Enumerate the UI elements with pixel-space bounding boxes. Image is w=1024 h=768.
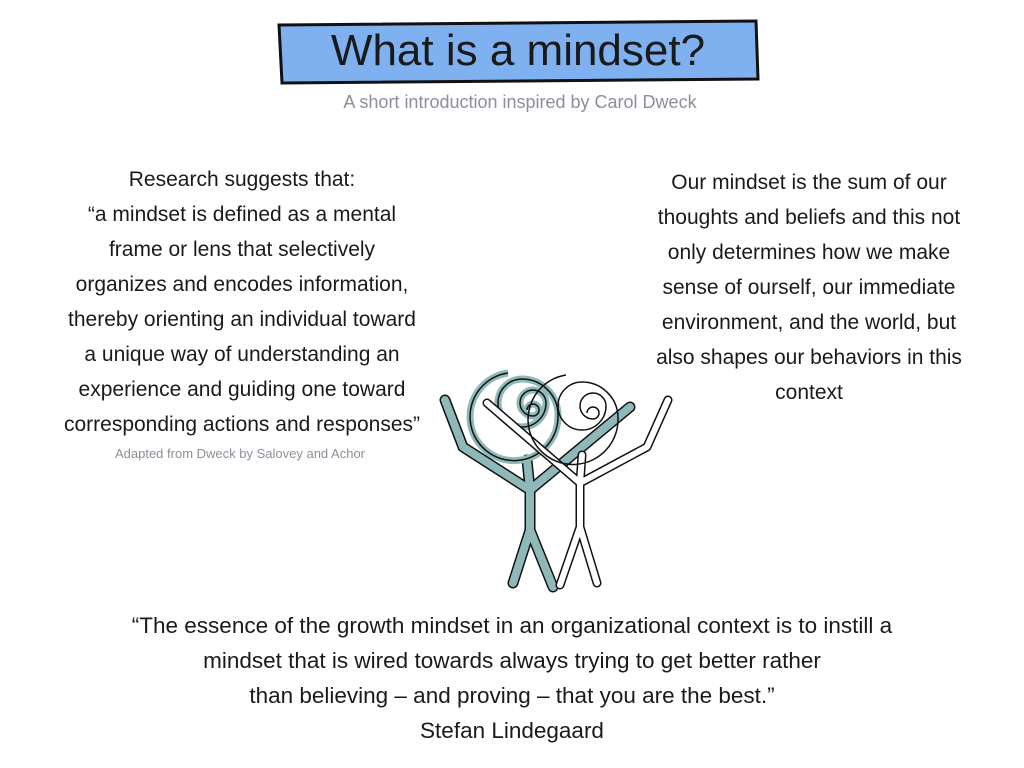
text block: mindset sum: only determines how we make xyxy=(668,241,950,264)
title text: What is a mindset? xyxy=(331,26,705,75)
white figure xyxy=(487,375,668,585)
subtitle: A short introduction inspired by Carol Dweck xyxy=(343,92,697,112)
text block: research quote: thereby orienting an individual toward xyxy=(68,308,416,331)
text block: mindset sum: Our mindset is the sum of our xyxy=(671,171,947,194)
illustration: two figures with spiral heads xyxy=(440,370,672,592)
bottom quote xyxy=(132,613,892,743)
bottom quote: than believing – and proving – that you are the best.” xyxy=(249,683,775,708)
text block: mindset sum xyxy=(656,171,962,404)
text block: research quote: Research suggests that: xyxy=(129,168,355,191)
bottom quote: Stefan Lindegaard xyxy=(420,718,604,743)
text block: research quote: experience and guiding one toward xyxy=(79,378,405,401)
text block: research quote: a unique way of understanding an xyxy=(84,343,400,366)
text block: research quote: organizes and encodes information, xyxy=(76,273,408,296)
text block: mindset sum: context xyxy=(775,381,843,404)
title banner xyxy=(277,20,760,84)
text block: mindset sum: environment, and the world, but xyxy=(662,311,956,334)
bottom quote: “The essence of the growth mindset in an organizational context is to instill a xyxy=(132,613,892,638)
source note: Adapted from Dweck by Salovey and Achor xyxy=(115,446,365,461)
text block: mindset sum: sense of ourself, our immediate xyxy=(662,276,955,299)
text block: research quote xyxy=(64,168,420,436)
bottom quote: mindset that is wired towards always trying to get better rather xyxy=(203,648,821,673)
text block: research quote: frame or lens that selectively xyxy=(109,238,375,261)
text block: mindset sum: also shapes our behaviors in this xyxy=(656,346,962,369)
teal figure xyxy=(445,373,630,587)
text block: mindset sum: thoughts and beliefs and this not xyxy=(658,206,960,229)
text block: research quote: “a mindset is defined as a mental xyxy=(88,203,396,226)
text block: research quote: corresponding actions and responses” xyxy=(64,413,420,436)
